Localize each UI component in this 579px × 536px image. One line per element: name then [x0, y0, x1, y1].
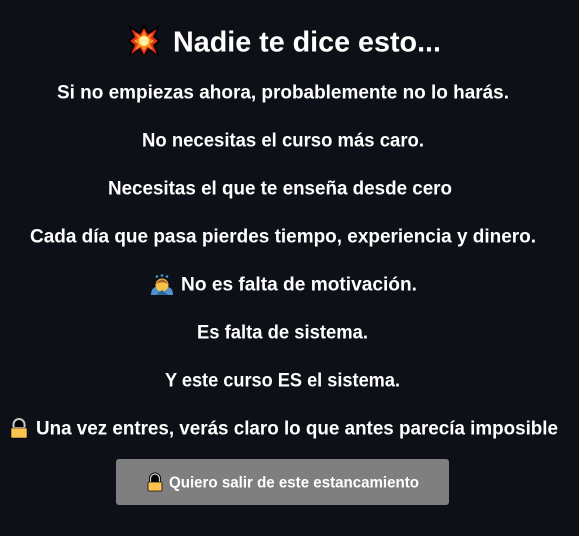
button: [116, 459, 449, 505]
button label: Quiero salir de este estancamiento: [169, 474, 419, 492]
text line 2: No necesitas el curso más caro.: [142, 130, 424, 152]
icon: lock: [11, 419, 27, 438]
text line 8 with lock icon: Una vez entres, verás claro lo que antes parecía imposible: [36, 418, 558, 440]
icon: button lock: [148, 474, 162, 491]
text line 4: Cada día que pasa pierdes tiempo, experiencia y dinero.: [30, 226, 536, 248]
text line 3: Necesitas el que te enseña desde cero: [108, 178, 452, 200]
icon: bowing person: [151, 274, 173, 295]
heading text: Nadie te dice esto...: [173, 26, 441, 58]
text line 1: Si no empiezas ahora, probablemente no lo harás.: [57, 82, 509, 104]
icon: explosion: [128, 24, 160, 58]
text line 6: Es falta de sistema.: [197, 322, 368, 344]
title: [128, 24, 441, 58]
text line 5 with bowing person icon: No es falta de motivación.: [181, 274, 417, 296]
text line 7: Y este curso ES el sistema.: [165, 370, 400, 392]
